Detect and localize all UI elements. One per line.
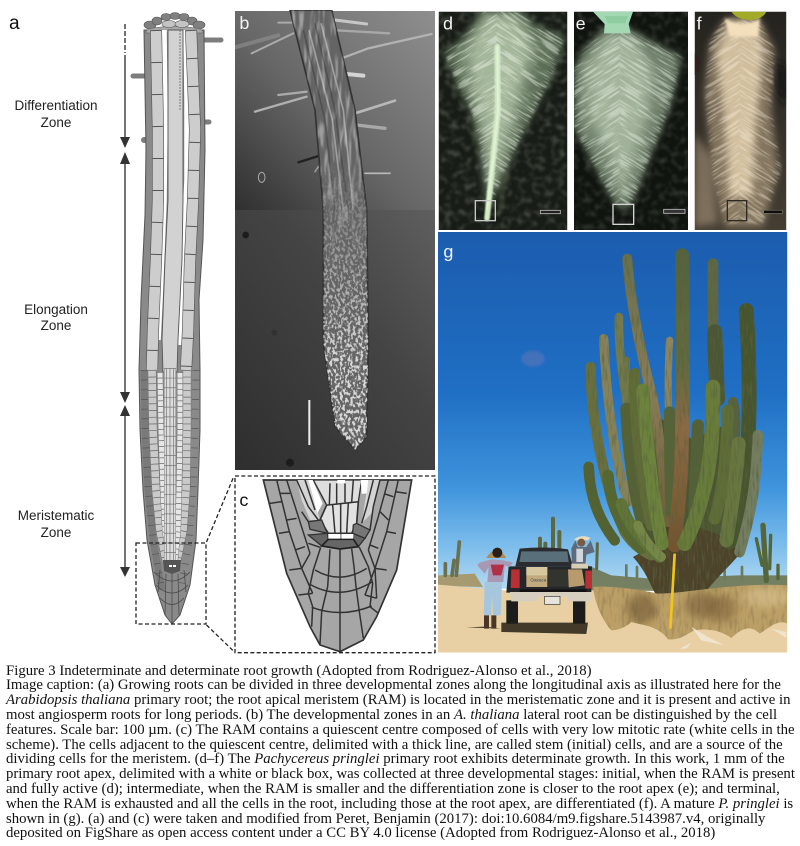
- arrow: differentiation zone: [120, 24, 130, 148]
- root hairs: [235, 20, 432, 173]
- sample box: [727, 201, 747, 221]
- distant vegetation: [438, 565, 787, 592]
- dark background: [574, 12, 688, 230]
- root hair cloud: [574, 30, 681, 210]
- panel f: terminal root photo: [694, 12, 786, 230]
- figure caption: when the RAM is exhausted and all the cells in the root, including those at the root apex, are differentiated (f). A mature P. pringlei is: [6, 796, 793, 812]
- scale bar: [764, 210, 782, 213]
- individual hairs right: [491, 12, 564, 204]
- background: [695, 12, 786, 230]
- zoom guide lines: [206, 476, 234, 652]
- cell walls: [270, 480, 407, 652]
- figure caption: scheme). The cells adjacent to the quiescent centre, delimited with a thick line, are called stem (initial) cells, and are a source of the: [6, 737, 783, 753]
- dark background: [439, 12, 567, 230]
- ground: [438, 585, 787, 653]
- cactus: [589, 255, 758, 598]
- figure caption: dividing cells for the meristem. (d–f) The Pachycereus pringlei primary root exhibits determinate growth. In this work, 1 mm of the: [6, 751, 785, 767]
- root silhouette: [139, 30, 205, 624]
- panel label a: a: [9, 13, 20, 34]
- stem base: [593, 12, 633, 33]
- figure caption: primary root apex, delimited with a white or black box, was collected at three developmental stages: initial, when the RAM is present: [6, 766, 795, 782]
- figure caption: Arabidopsis thaliana primary root; the root apical meristem (RAM) is located in the meristematic zone and it is present and active in: [6, 692, 790, 708]
- sample box: [475, 201, 495, 221]
- panel label f: f: [697, 13, 703, 33]
- dashed selection box: [136, 543, 206, 624]
- cactus mass behind arms: [635, 412, 736, 549]
- scale bar: [308, 400, 310, 445]
- root hair cloud: [445, 12, 565, 207]
- scale bar: [664, 209, 685, 213]
- stele: [162, 30, 183, 372]
- panel b: lateral root micrograph: [235, 10, 435, 470]
- label: meristematic zone: Meristematic: [18, 508, 95, 523]
- root hairs: [133, 40, 221, 140]
- trunk: [633, 520, 741, 598]
- main root axis: [729, 37, 751, 218]
- individual hairs left: [444, 12, 498, 196]
- pickup truck: Oaxaca: [530, 577, 547, 582]
- panel label d: d: [443, 13, 453, 33]
- person on the left: [477, 548, 513, 629]
- panel label c: c: [239, 490, 248, 510]
- arrow: meristematic zone: [120, 405, 130, 577]
- panel a: root zones schematic: [9, 12, 234, 652]
- arrow: elongation zone: [120, 152, 130, 403]
- sky: [438, 232, 787, 589]
- shrubs: [593, 584, 790, 642]
- figure caption: and fully active (d); intermediate, when the RAM is smaller and the differentiation zone is closer to the root apex (e); and terminal,: [6, 781, 780, 797]
- figure caption: Figure 3 Indeterminate and determinate root growth (Adopted from Rodriguez-Alonso et al., 2018): [6, 662, 592, 678]
- root cap cells: [154, 570, 190, 624]
- root cap dome top: [144, 12, 205, 33]
- upper cortex file right: [186, 30, 195, 370]
- central light cells: [320, 502, 358, 533]
- figure caption: features. Scale bar: 100 µm. (c) The RAM contains a quiescent centre composed of cells with very low mitotic rate (white cells in the: [6, 722, 795, 738]
- inner light tissue: [297, 480, 320, 520]
- quiescent centre white cells: [328, 534, 353, 539]
- pickup truck: [506, 547, 592, 624]
- white gaps: [308, 480, 368, 513]
- debris dots: [242, 172, 294, 467]
- label: differentiation zone: Differentiation: [14, 98, 98, 113]
- tip silhouette: [263, 480, 412, 652]
- panel label b: b: [239, 13, 249, 33]
- panel e: intermediate root photo: [574, 12, 688, 230]
- sample box: [613, 204, 634, 224]
- lower micrograph background: [235, 210, 435, 470]
- person on the truck: [571, 536, 595, 569]
- dashed frame: [235, 476, 435, 653]
- seed base: [731, 12, 766, 20]
- scale bar: [540, 210, 560, 214]
- main root axis: [610, 50, 630, 217]
- truck shadow: [466, 623, 588, 634]
- label: meristematic zone: Zone: [41, 525, 71, 540]
- upper white channels: [158, 30, 187, 345]
- faint root shadow: [500, 170, 506, 213]
- upper cortex file left: [152, 30, 158, 370]
- upper micrograph background: [235, 11, 435, 210]
- rocks: [680, 627, 786, 649]
- individual hairs left: [574, 28, 620, 206]
- label: differentiation zone: Zone: [41, 115, 71, 130]
- panel label e: e: [576, 13, 586, 33]
- root schematic: [133, 12, 221, 624]
- stem cell niche: [163, 560, 181, 574]
- root body: [289, 10, 369, 450]
- figure caption: deposited on FigShare as open access content under a CC BY 4.0 license (Adopted from Rodriguez-Alonso et al., 2018): [6, 825, 715, 841]
- individual hairs right: [618, 30, 682, 210]
- panel d: initial root photo: [438, 12, 568, 230]
- label: elongation zone: Elongation: [24, 302, 88, 317]
- label: elongation zone: Zone: [41, 318, 71, 333]
- figure caption: most angiosperm roots for long periods. (b) The developmental zones in an A. thaliana lateral root can be distinguished by the cell: [6, 707, 777, 723]
- main root axis: [487, 47, 498, 218]
- individual hairs left: [704, 18, 740, 224]
- distant cacti: [445, 519, 778, 580]
- figure caption: shown in (g). (a) and (c) were taken and modified from Peret, Benjamin (2017): doi:10.6084/m9.figshare.5143987.v4, originally: [6, 811, 765, 827]
- panel label g: g: [443, 242, 453, 262]
- stem cell dark cells: [308, 520, 370, 538]
- meristem cell files: [144, 368, 196, 590]
- root hair cloud: [705, 18, 778, 227]
- figure caption: Image caption: (a) Growing roots can be divided in three developmental zones along the longitudinal axis as illustrated here for the: [6, 677, 781, 693]
- root tip cells: [263, 480, 412, 652]
- figure caption: [5, 662, 795, 841]
- panel c: root apex detail: [235, 476, 435, 653]
- cactus arms: [589, 255, 758, 557]
- individual hairs right: [738, 18, 782, 224]
- panel g: mature cactus photo: [438, 232, 790, 653]
- yellow measuring pole: [670, 554, 675, 629]
